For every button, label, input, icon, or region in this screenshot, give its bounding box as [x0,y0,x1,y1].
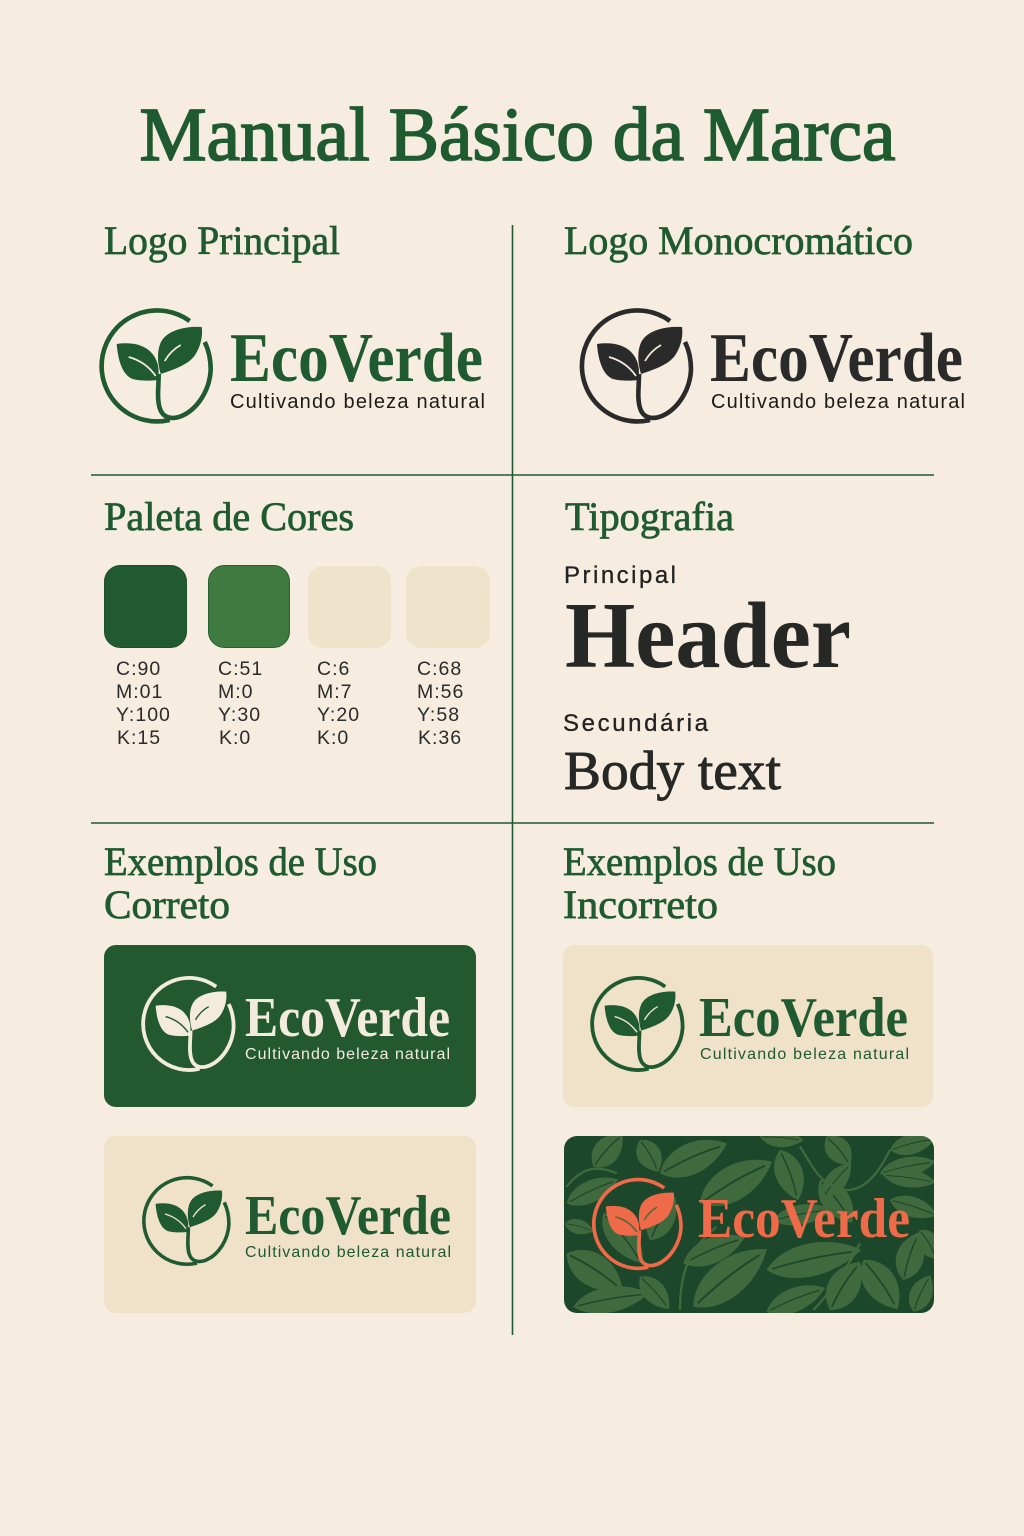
swatch: medium green [208,566,290,749]
icon: sprout green small [592,978,683,1070]
card: logo on cream: EcoVerde [245,1185,451,1247]
swatch: beige: Y:58 [417,704,460,726]
swatch: medium green: C:51 [218,658,263,680]
card: logo on green: EcoVerde [245,987,450,1049]
swatch: dark green: M:01 [116,681,163,703]
swatch: cream: M:7 [317,681,353,703]
leaf pattern background [564,1136,934,1313]
icon: sprout orange [594,1180,681,1268]
label: principal: Principal [564,562,676,589]
logo: EcoVerde mono [582,310,965,421]
sample: body text: Body text [564,740,781,801]
swatch: medium green: M:0 [218,681,254,703]
panel: tipografia [563,494,851,801]
sample: header: Header [565,584,851,688]
logo: EcoVerde mono: Cultivando beleza natural [711,391,965,413]
card: logo on cream [104,1136,476,1313]
logo: EcoVerde green: Cultivando beleza natural [230,391,485,413]
swatch: dark green: K:15 [117,727,161,749]
logo: EcoVerde green [102,310,485,421]
icon: sprout light [143,978,234,1070]
panel: logo monocromático [564,218,965,421]
heading: exemplos de uso correto: Exemplos de Uso [104,839,377,884]
card: logo wrong spacing on cream: Cultivando beleza natural [700,1046,909,1063]
logo: EcoVerde mono: EcoVerde [710,320,963,397]
panel: logo principal [102,218,485,421]
panel: paleta de cores [104,494,490,749]
swatch: cream: K:0 [317,727,349,749]
swatch: medium green: Y:30 [218,704,261,726]
panel: uso incorreto [558,839,947,1322]
swatch: cream: C:6 [317,658,350,680]
heading: exemplos de uso incorreto: Incorreto [563,882,718,927]
swatch: cream [308,566,391,749]
swatch: medium green: K:0 [219,727,251,749]
swatch: dark green [104,566,186,749]
swatch: dark green: C:90 [116,658,161,680]
icon: sprout in ring [102,310,211,421]
swatch: beige: C:68 [417,658,462,680]
icon: sprout in ring mono [582,310,691,421]
card: logo on green [104,945,476,1107]
card: orange logo on leaf pattern: EcoVerde [698,1188,910,1250]
card: logo wrong spacing on cream: EcoVerde [699,987,908,1049]
swatch: dark green: Y:100 [116,704,171,726]
title: Manual Básico da Marca [140,93,896,177]
card: logo wrong spacing on cream [563,945,933,1107]
card: logo on cream: Cultivando beleza natural [245,1244,451,1261]
label: secundária: Secundária [563,710,709,737]
heading: paleta de cores: Paleta de Cores [104,494,354,539]
swatch: cream: Y:20 [317,704,360,726]
heading: logo principal: Logo Principal [104,218,340,263]
card: orange logo on leaf pattern [564,1136,934,1313]
heading: logo monocromático: Logo Monocromático [564,218,913,263]
heading: tipografia: Tipografia [565,494,734,539]
icon: sprout green [144,1178,229,1264]
swatch: beige: M:56 [417,681,464,703]
heading: exemplos de uso correto: Correto [104,882,230,927]
heading: exemplos de uso incorreto: Exemplos de Uso [563,839,836,884]
panel: uso correto [104,839,476,1313]
swatch: beige: K:36 [418,727,462,749]
card: logo on green: Cultivando beleza natural [245,1046,450,1063]
swatch: beige [406,566,490,749]
logo: EcoVerde green: EcoVerde [230,320,483,397]
